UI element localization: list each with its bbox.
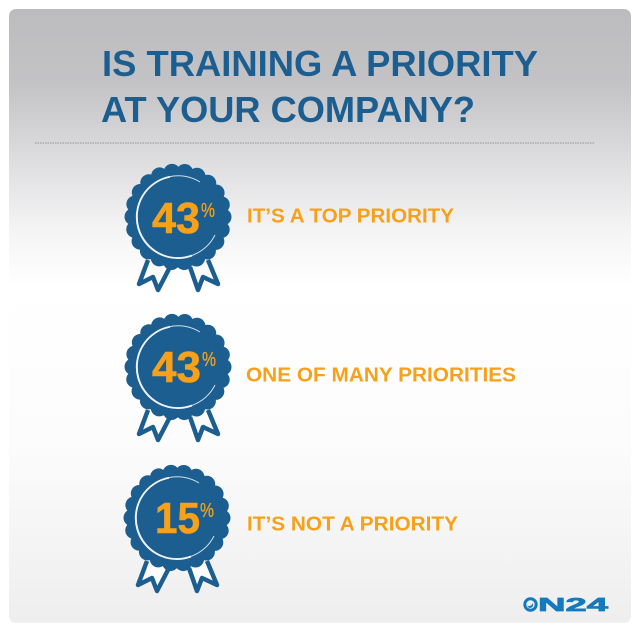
title — [101, 43, 538, 130]
title: IS TRAINING A PRIORITY — [102, 43, 538, 84]
label: not a priority: IT’S NOT A PRIORITY — [247, 514, 459, 536]
badge: 15% not a priority — [129, 470, 225, 591]
badge: 43% top priority: 43 — [152, 194, 200, 243]
badge: 43% one of many — [130, 319, 226, 440]
logo: ON24: N24 — [538, 595, 608, 615]
badge: 15% not a priority: 15 — [155, 494, 200, 543]
label: top priority: IT’S A TOP PRIORITY — [247, 206, 455, 228]
badge: 43% top priority — [130, 169, 226, 290]
badge: 43% one of many: % — [202, 349, 216, 371]
logo: ON24 — [525, 595, 608, 615]
badge: 43% one of many: 43 — [152, 343, 201, 392]
label: one of many priorities: ONE OF MANY PRIORITIES — [246, 364, 516, 386]
badge: 15% not a priority: % — [200, 500, 214, 522]
title: AT YOUR COMPANY? — [101, 89, 475, 130]
badge: 43% top priority: % — [201, 200, 215, 222]
